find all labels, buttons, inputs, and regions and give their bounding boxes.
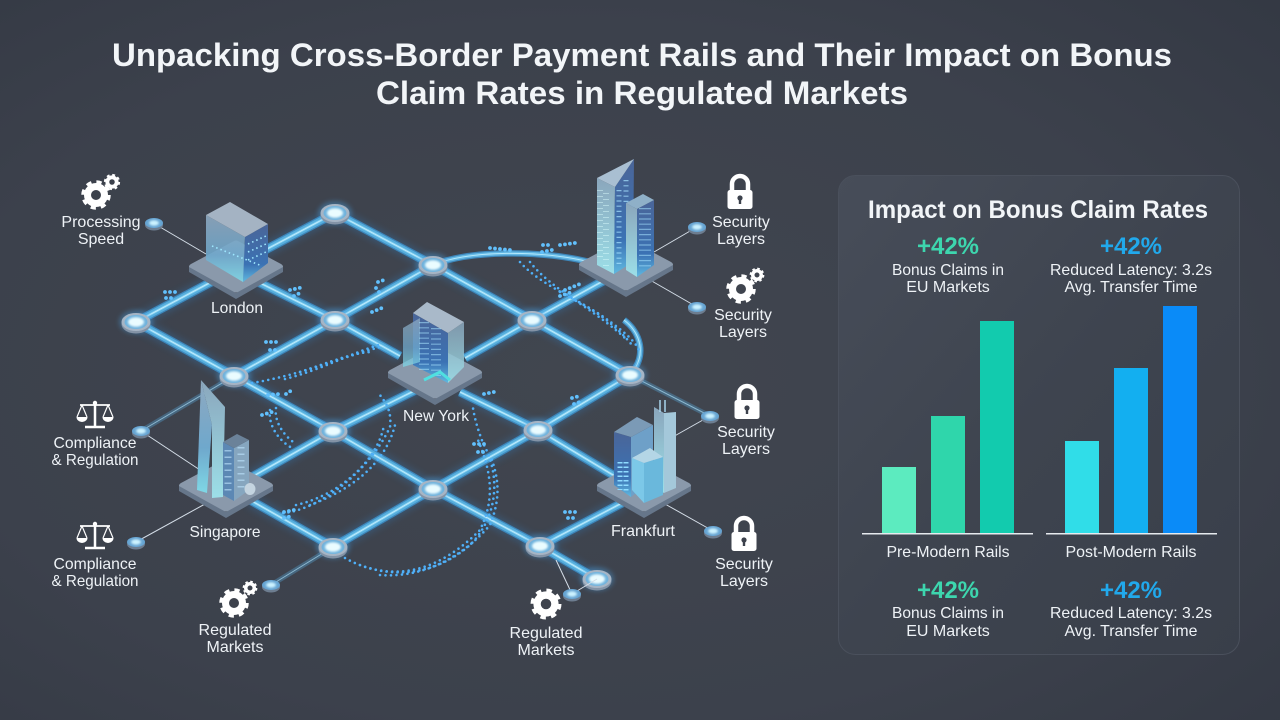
callout: security layers 1: Security (712, 214, 770, 231)
callout: compliance and regulation 1: Compliance (54, 435, 137, 452)
stat: top right: Avg. Transfer Time (1064, 279, 1198, 296)
stat: top right (1050, 233, 1212, 296)
panel: impact on bonus claim rates (838, 176, 1240, 654)
building: Singapore (179, 380, 273, 518)
callout leader lines and terminals (127, 218, 722, 602)
callout: regulated markets 2 (510, 591, 582, 659)
callout: regulated markets 2: Regulated (510, 625, 582, 642)
callout: security layers 4: Layers (720, 573, 768, 590)
stat: bottom right: Reduced Latency: 3.2s (1050, 605, 1212, 622)
stat: bottom right (1050, 577, 1212, 640)
callout: processing speed: Speed (78, 231, 124, 248)
stat: bottom right: Avg. Transfer Time (1064, 623, 1198, 640)
building: Frankfurt (597, 400, 691, 518)
stat: bottom left: EU Markets (906, 623, 990, 640)
stat: top left: EU Markets (906, 279, 990, 296)
callout: processing speed: Processing (61, 214, 141, 231)
stat: top right: +42% (1100, 233, 1162, 260)
title (112, 37, 1172, 111)
callout: security layers 2: Layers (719, 324, 767, 341)
city labels: New York (403, 408, 470, 425)
bar chart: pre-modern rails: Pre-Modern Rails (886, 544, 1010, 561)
building: New York (388, 302, 482, 405)
building: data tower top right (579, 159, 673, 297)
stat: bottom left: Bonus Claims in (892, 605, 1004, 622)
callout: security layers 4 (715, 518, 773, 590)
callout: security layers 1: Layers (717, 231, 765, 248)
city labels (190, 300, 676, 541)
callout: security layers 1 (712, 176, 770, 248)
title: Unpacking Cross-Border Payment Rails and Their Impact on Bonus (112, 37, 1172, 73)
stat: bottom right: +42% (1100, 577, 1162, 604)
bar chart: post-modern rails: Post-Modern Rails (1066, 544, 1196, 561)
city labels: Singapore (190, 524, 261, 541)
callout: regulated markets 1: Markets (207, 639, 263, 656)
callout: compliance and regulation 1: & Regulation (52, 452, 138, 469)
callout: security layers 3: Layers (722, 441, 770, 458)
callout: security layers 2 (714, 269, 772, 341)
title: Claim Rates in Regulated Markets (376, 75, 908, 111)
bar chart: pre-modern rails (862, 321, 1033, 561)
stat: top left (892, 233, 1004, 296)
callout: regulated markets 2: Markets (518, 642, 574, 659)
callout: processing speed (61, 175, 141, 248)
network diagram: payment rails (136, 213, 710, 585)
callout: compliance and regulation 2: & Regulation (52, 573, 138, 590)
bar chart: post-modern rails (1046, 306, 1217, 561)
callout: regulated markets 1: Regulated (199, 622, 271, 639)
panel heading: Impact on Bonus Claim Rates (868, 196, 1208, 224)
callout: security layers 4: Security (715, 556, 773, 573)
callout: compliance and regulation 1 (52, 401, 138, 469)
callout: security layers 2: Security (714, 307, 772, 324)
stat: top left: +42% (917, 233, 979, 260)
city labels: Frankfurt (611, 523, 676, 540)
callout: security layers 3: Security (717, 424, 775, 441)
stat: bottom left: +42% (917, 577, 979, 604)
callout: compliance and regulation 2 (52, 522, 138, 590)
callout: security layers 3 (717, 386, 775, 458)
network nodes (119, 201, 647, 591)
building: London (189, 202, 283, 299)
callout: regulated markets 1 (199, 582, 271, 656)
callout: compliance and regulation 2: Compliance (54, 556, 137, 573)
city labels: London (211, 300, 263, 317)
stat: bottom left (892, 577, 1004, 640)
data-flow particles (165, 243, 640, 575)
stat: top right: Reduced Latency: 3.2s (1050, 262, 1212, 279)
stat: top left: Bonus Claims in (892, 262, 1004, 279)
